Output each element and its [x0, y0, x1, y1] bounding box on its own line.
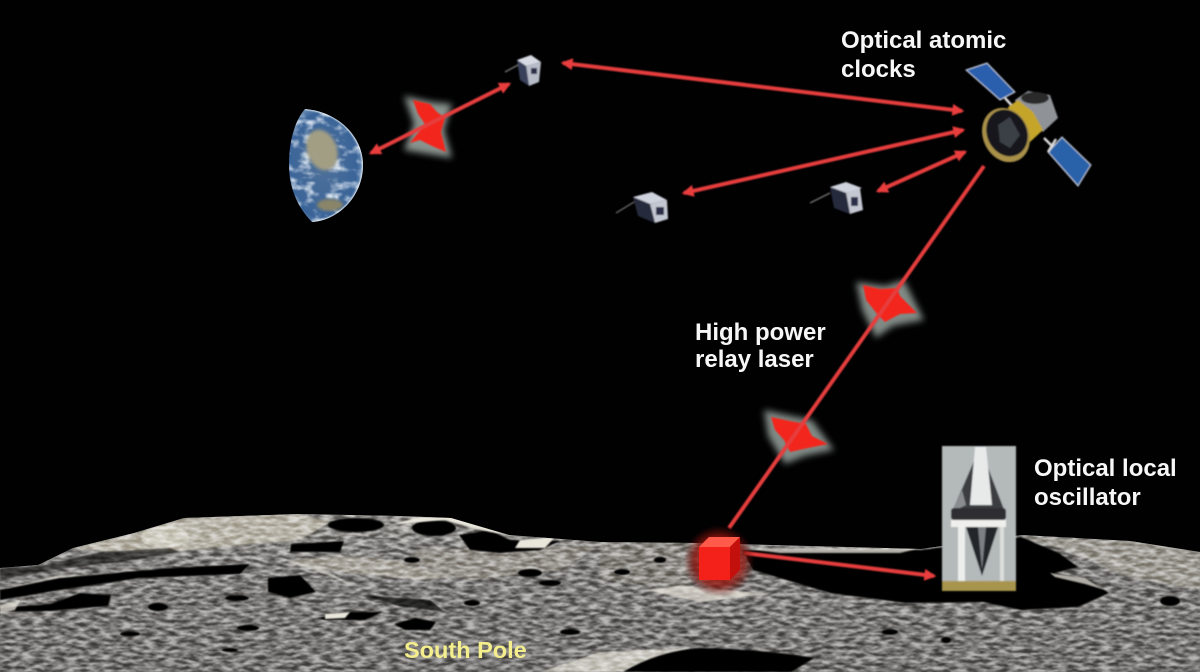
large crater behind oscillator — [742, 537, 1109, 610]
bright rims — [0, 517, 1105, 619]
lunar surface — [0, 510, 1200, 672]
right cubesat — [810, 182, 863, 214]
clock satellite — [966, 63, 1091, 186]
cloud texture — [289, 110, 363, 222]
arrow: laser beam to surface — [729, 166, 984, 528]
gold bus — [1008, 100, 1043, 142]
optical local oscillator — [942, 446, 1016, 591]
solar panel upper — [966, 63, 1015, 100]
instrument body — [1015, 91, 1058, 132]
label: High power relay laser: High power — [695, 319, 826, 346]
label: Optical local oscillator: oscillator — [1034, 484, 1141, 511]
relay cubesat — [505, 55, 541, 86]
laser star node: upper relay — [856, 280, 924, 338]
panel struts — [1005, 98, 1056, 152]
continents — [304, 128, 340, 172]
label: Optical atomic clocks: Optical atomic — [841, 27, 1006, 54]
lit hill patches — [0, 514, 1200, 672]
arrow: clock satellite to relay satellite — [563, 63, 962, 111]
laser star node: Earth link — [404, 96, 452, 158]
label: Optical local oscillator: Optical local — [1034, 455, 1177, 482]
label: Optical atomic clocks: clocks — [841, 56, 916, 83]
label: High power relay laser: relay laser — [695, 346, 814, 373]
arrows — [371, 63, 984, 576]
laser star node: lower relay — [764, 410, 834, 464]
arrow: clock satellite to right cubesat — [878, 152, 965, 191]
arrow: clock satellite to left cubesat — [684, 130, 963, 193]
speckled regolith texture — [0, 510, 1200, 672]
arrow: surface unit to oscillator — [744, 553, 934, 576]
label: South Pole: South Pole — [404, 637, 527, 663]
solar panel lower — [1048, 137, 1091, 186]
dish — [973, 100, 1039, 170]
Earth — [289, 109, 363, 222]
red surface unit with glow — [683, 525, 755, 597]
arrow: Earth to relay satellite — [371, 84, 509, 153]
bright limb — [305, 109, 363, 222]
left cubesat — [616, 192, 668, 223]
crater shadows — [0, 518, 1180, 672]
